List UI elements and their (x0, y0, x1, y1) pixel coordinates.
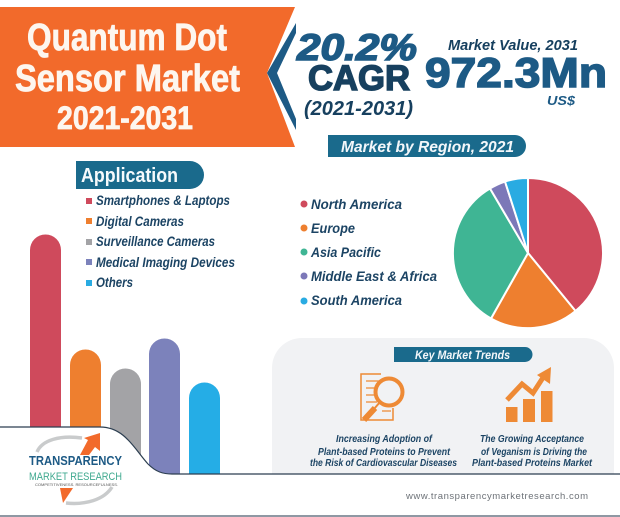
heading: application (76, 161, 204, 189)
logo arrows (80, 433, 100, 455)
region legend (300, 196, 437, 308)
banner title: 2021-2031 (57, 100, 193, 136)
trend text left (310, 434, 457, 469)
key trends panel (272, 338, 614, 474)
pie chart (453, 178, 603, 328)
logo wordmark: TRANSPARENCY (29, 454, 123, 468)
key trends heading: Key Market Trends (415, 350, 510, 362)
trend text right: The Growing Acceptance (480, 434, 584, 445)
heading: market by region: Market by Region, 2021 (341, 139, 514, 156)
region legend: Asia Pacific (310, 244, 381, 260)
bar chart (30, 235, 220, 474)
heading: market by region (328, 135, 526, 157)
market value stat (425, 37, 607, 108)
region legend: North America (311, 196, 402, 212)
region legend: South America (311, 292, 402, 308)
chevron (267, 23, 296, 130)
market value stat: 972.3Mn (425, 49, 607, 96)
market value stat: Market Value, 2031 (448, 37, 578, 54)
icon: rising bar chart (506, 367, 552, 422)
logo: MARKET RESEARCH (29, 471, 122, 483)
CAGR stat: (2021-2031) (304, 98, 413, 120)
header banner (0, 7, 295, 147)
trend text left: the Risk of Cardiovascular Diseases (310, 458, 457, 469)
icon: document with magnifier (361, 374, 402, 420)
logo arcs (37, 437, 112, 503)
trend text left: Plant-based Proteins to Prevent (318, 447, 451, 458)
application legend: Medical Imaging Devices (96, 254, 235, 270)
application legend: Others (96, 274, 133, 290)
CAGR stat: 20.2% (296, 27, 417, 68)
heading: application: Application (81, 165, 178, 187)
CAGR stat (296, 27, 417, 120)
region legend: Middle East & Africa (311, 268, 437, 284)
banner title (15, 17, 240, 136)
CAGR stat: CAGR (308, 59, 410, 98)
website url: www.transparencymarketresearch.com (405, 491, 588, 502)
bottom rule (0, 515, 620, 517)
bottom white area with curve (0, 427, 620, 517)
banner title: Quantum Dot (27, 17, 227, 59)
application legend: Digital Cameras (96, 213, 184, 229)
application legend (86, 192, 235, 290)
region legend: Europe (311, 220, 355, 236)
trend text right: of Veganism is Driving the (481, 447, 587, 458)
key trends heading (394, 347, 532, 362)
application legend: Smartphones & Laptops (96, 192, 230, 208)
trend text left: Increasing Adoption of (336, 434, 433, 445)
application legend: Surveillance Cameras (96, 233, 215, 249)
logo: COMPETITIVENESS. RESOURCEFULNESS. (35, 483, 118, 487)
market value stat: US$ (547, 93, 576, 108)
banner title: Sensor Market (15, 58, 240, 100)
trend text right: Plant-based Proteins Market (472, 458, 593, 469)
trend text right (472, 434, 593, 469)
logo (29, 433, 123, 503)
